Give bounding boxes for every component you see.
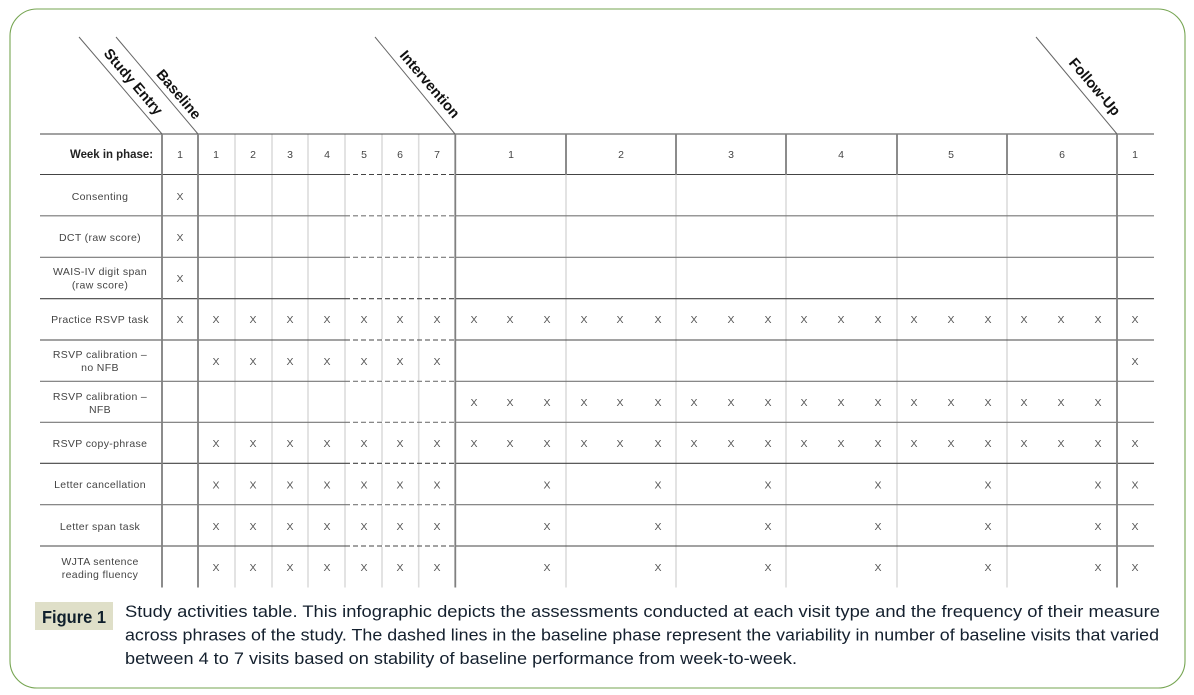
row: RSVP calibration NFB: X [580,397,588,409]
row: RSVP copy-phrase: X [837,438,845,450]
row: RSVP copy-phrase: X [1094,438,1102,450]
row: RSVP copy-phrase: X [727,438,735,450]
row: Consenting [72,191,184,203]
row: RSVP calibration no NFB: X [286,356,294,368]
row: WJTA sentence reading fluency: WJTA sentence [61,556,139,568]
row: DCT: X [176,232,184,244]
row: Practice RSVP task: X [360,314,368,326]
figure label [35,602,113,630]
row: Consenting: X [176,191,184,203]
row: WJTA sentence reading fluency: X [212,562,220,574]
row: RSVP calibration no NFB: X [360,356,368,368]
row: Letter span task: X [433,521,441,533]
row: RSVP copy-phrase: X [654,438,662,450]
row: Letter span task: X [212,521,220,533]
row: WJTA sentence reading fluency: X [543,562,551,574]
row: RSVP calibration NFB: X [984,397,992,409]
row: RSVP copy-phrase: X [470,438,478,450]
row: Letter span task: X [360,521,368,533]
row: RSVP calibration NFB: RSVP calibration – [53,391,147,403]
row: Practice RSVP task: X [1131,314,1139,326]
row: Practice RSVP task: X [176,314,184,326]
row: RSVP copy-phrase: X [800,438,808,450]
row: Letter span task: Letter span task [60,521,141,533]
row: Practice RSVP task: X [690,314,698,326]
row: RSVP copy-phrase: X [249,438,257,450]
row: WAIS-IV digit span: WAIS-IV digit span [53,266,147,278]
caption text [125,602,1160,668]
row: RSVP calibration NFB: X [947,397,955,409]
row: RSVP calibration NFB: X [1020,397,1028,409]
row: RSVP copy-phrase: X [947,438,955,450]
row: Practice RSVP task: X [616,314,624,326]
row: RSVP calibration NFB: X [727,397,735,409]
row: week in phase: 2 [250,149,256,161]
row: Practice RSVP task: X [764,314,772,326]
caption text: across phrases of the study. The dashed lines in the baseline phase represent the variability in number of baseline visits that varied [125,626,1159,644]
row: Letter span task: X [874,521,882,533]
row: WJTA sentence reading fluency: X [249,562,257,574]
row: week in phase [70,149,1138,161]
row: Letter cancellation: X [984,480,992,492]
row: Practice RSVP task: X [654,314,662,326]
row: RSVP copy-phrase: X [1131,438,1139,450]
row: Letter span task: X [396,521,404,533]
row: RSVP calibration NFB: X [654,397,662,409]
row: week in phase: 5 [948,149,954,161]
phase heading: Baseline: Baseline [153,67,204,123]
row: Practice RSVP task: X [433,314,441,326]
row: Practice RSVP task [51,314,1139,326]
row: RSVP copy-phrase: X [616,438,624,450]
row: RSVP copy-phrase: X [984,438,992,450]
row: week in phase: 1 [177,149,183,161]
row: RSVP calibration NFB: X [874,397,882,409]
row: Practice RSVP task: X [1057,314,1065,326]
row: WJTA sentence reading fluency: reading fluency [62,569,139,581]
row: RSVP copy-phrase [53,438,1139,450]
row: Letter span task [60,521,1139,533]
row: RSVP calibration NFB: X [800,397,808,409]
row: WAIS-IV digit span [53,266,184,292]
row: Letter span task: X [984,521,992,533]
row: WJTA sentence reading fluency: X [433,562,441,574]
study activities table [40,37,1154,588]
row: week in phase: 3 [728,149,734,161]
row: week in phase: 4 [324,149,330,161]
row: Letter cancellation: X [286,480,294,492]
row: week in phase: 7 [434,149,440,161]
row: WJTA sentence reading fluency: X [654,562,662,574]
row: Practice RSVP task: X [323,314,331,326]
row: RSVP calibration no NFB: RSVP calibration – [53,349,147,361]
row: RSVP calibration NFB: X [543,397,551,409]
row: WAIS-IV digit span: X [176,273,184,285]
row: RSVP copy-phrase: X [764,438,772,450]
row: Practice RSVP task: X [800,314,808,326]
row: RSVP calibration no NFB: X [249,356,257,368]
row: Practice RSVP task: X [910,314,918,326]
phase heading: Study Entry: Study Entry [100,46,166,119]
row: WJTA sentence reading fluency: X [764,562,772,574]
row: RSVP copy-phrase: X [286,438,294,450]
row: RSVP calibration no NFB: no NFB [81,362,119,374]
row: Practice RSVP task: X [543,314,551,326]
row: RSVP copy-phrase: X [910,438,918,450]
row: Letter cancellation: X [433,480,441,492]
row: Consenting: Consenting [72,191,128,203]
row: RSVP calibration NFB: X [910,397,918,409]
row: Letter cancellation: X [874,480,882,492]
row: RSVP calibration NFB: X [1094,397,1102,409]
row: Letter cancellation: X [1131,480,1139,492]
figure label: Figure 1 [42,607,106,627]
phase heading: Follow-Up: Follow-Up [1065,55,1123,119]
row: week in phase: 1 [213,149,219,161]
row: Letter cancellation [54,479,1139,492]
caption text: between 4 to 7 visits based on stability of baseline performance from week-to-week. [125,649,797,668]
caption text: Study activities table. This infographic depicts the assessments conducted at each visit type and the frequency of their measure [125,602,1160,621]
row: RSVP copy-phrase: X [1020,438,1028,450]
row: RSVP copy-phrase: X [543,438,551,450]
row: Practice RSVP task: X [1020,314,1028,326]
row: Practice RSVP task: X [286,314,294,326]
row: Letter span task: X [1094,521,1102,533]
row: RSVP copy-phrase: X [580,438,588,450]
row: RSVP calibration NFB: X [764,397,772,409]
row: WJTA sentence reading fluency: X [323,562,331,574]
row: week in phase: 2 [618,149,624,161]
row: Letter span task: X [654,521,662,533]
row: RSVP calibration NFB [53,391,1102,416]
row: Letter span task: X [764,521,772,533]
row: Practice RSVP task: X [727,314,735,326]
row: RSVP copy-phrase: X [323,438,331,450]
row: RSVP calibration NFB: X [506,397,514,409]
row: Letter span task: X [249,521,257,533]
row: week in phase: 4 [838,149,844,161]
row: Letter span task: X [543,521,551,533]
row: RSVP calibration no NFB: X [1131,356,1139,368]
row: RSVP calibration NFB: NFB [89,404,111,416]
row: RSVP calibration NFB: X [837,397,845,409]
row: RSVP copy-phrase: RSVP copy-phrase [53,438,147,450]
row: Practice RSVP task: X [984,314,992,326]
row: RSVP calibration NFB: X [690,397,698,409]
row: WJTA sentence reading fluency: X [984,562,992,574]
dashed baseline variability lines [350,174,455,546]
row: Practice RSVP task: X [470,314,478,326]
row: RSVP copy-phrase: X [433,438,441,450]
row: RSVP calibration NFB: X [616,397,624,409]
row: Practice RSVP task: X [874,314,882,326]
row: Letter cancellation: X [654,480,662,492]
row: RSVP calibration no NFB: X [323,356,331,368]
row: WJTA sentence reading fluency [61,556,1139,581]
row: Letter cancellation: X [764,480,772,492]
row: RSVP copy-phrase: X [396,438,404,450]
row: Letter cancellation: X [543,480,551,492]
row: Letter cancellation: X [249,480,257,492]
row: Practice RSVP task: Practice RSVP task [51,314,149,326]
row: RSVP copy-phrase: X [360,438,368,450]
row: Practice RSVP task: X [249,314,257,326]
row: WJTA sentence reading fluency: X [396,562,404,574]
row: week in phase: 5 [361,149,367,161]
row: WJTA sentence reading fluency: X [286,562,294,574]
row: Letter span task: X [286,521,294,533]
row: Practice RSVP task: X [396,314,404,326]
row: WJTA sentence reading fluency: X [360,562,368,574]
row: RSVP copy-phrase: X [212,438,220,450]
phase heading: Intervention: Intervention [396,48,462,122]
row: WJTA sentence reading fluency: X [1094,562,1102,574]
row: Letter cancellation: X [360,480,368,492]
row: Letter cancellation: X [396,480,404,492]
row: Practice RSVP task: X [212,314,220,326]
row: week in phase: 1 [1132,149,1138,161]
row: RSVP copy-phrase: X [506,438,514,450]
row: Practice RSVP task: X [947,314,955,326]
row: RSVP calibration no NFB: X [396,356,404,368]
row: Letter cancellation: X [1094,480,1102,492]
row: Letter span task: X [323,521,331,533]
row: DCT: DCT (raw score) [59,232,141,244]
row: RSVP calibration NFB: X [1057,397,1065,409]
row: RSVP copy-phrase: X [690,438,698,450]
row: week in phase: Week in phase: [70,149,153,161]
row: Letter cancellation: X [323,480,331,492]
row: RSVP copy-phrase: X [874,438,882,450]
row: Practice RSVP task: X [837,314,845,326]
row: RSVP copy-phrase: X [1057,438,1065,450]
row: WAIS-IV digit span: (raw score) [72,280,128,292]
table grid [40,37,1154,588]
row: Letter span task: X [1131,521,1139,533]
row: week in phase: 3 [287,149,293,161]
row: week in phase: 1 [508,149,514,161]
row: Practice RSVP task: X [580,314,588,326]
row: WJTA sentence reading fluency: X [1131,562,1139,574]
row: RSVP calibration NFB: X [470,397,478,409]
row: DCT [59,232,184,244]
row: week in phase: 6 [397,149,403,161]
row: RSVP calibration no NFB: X [212,356,220,368]
row: week in phase: 6 [1059,149,1065,161]
row: Practice RSVP task: X [506,314,514,326]
row: WJTA sentence reading fluency: X [874,562,882,574]
row: Letter cancellation: X [212,480,220,492]
row: RSVP calibration no NFB [53,349,1139,374]
row: RSVP calibration no NFB: X [433,356,441,368]
row: Practice RSVP task: X [1094,314,1102,326]
row: Letter cancellation: Letter cancellation [54,479,146,491]
